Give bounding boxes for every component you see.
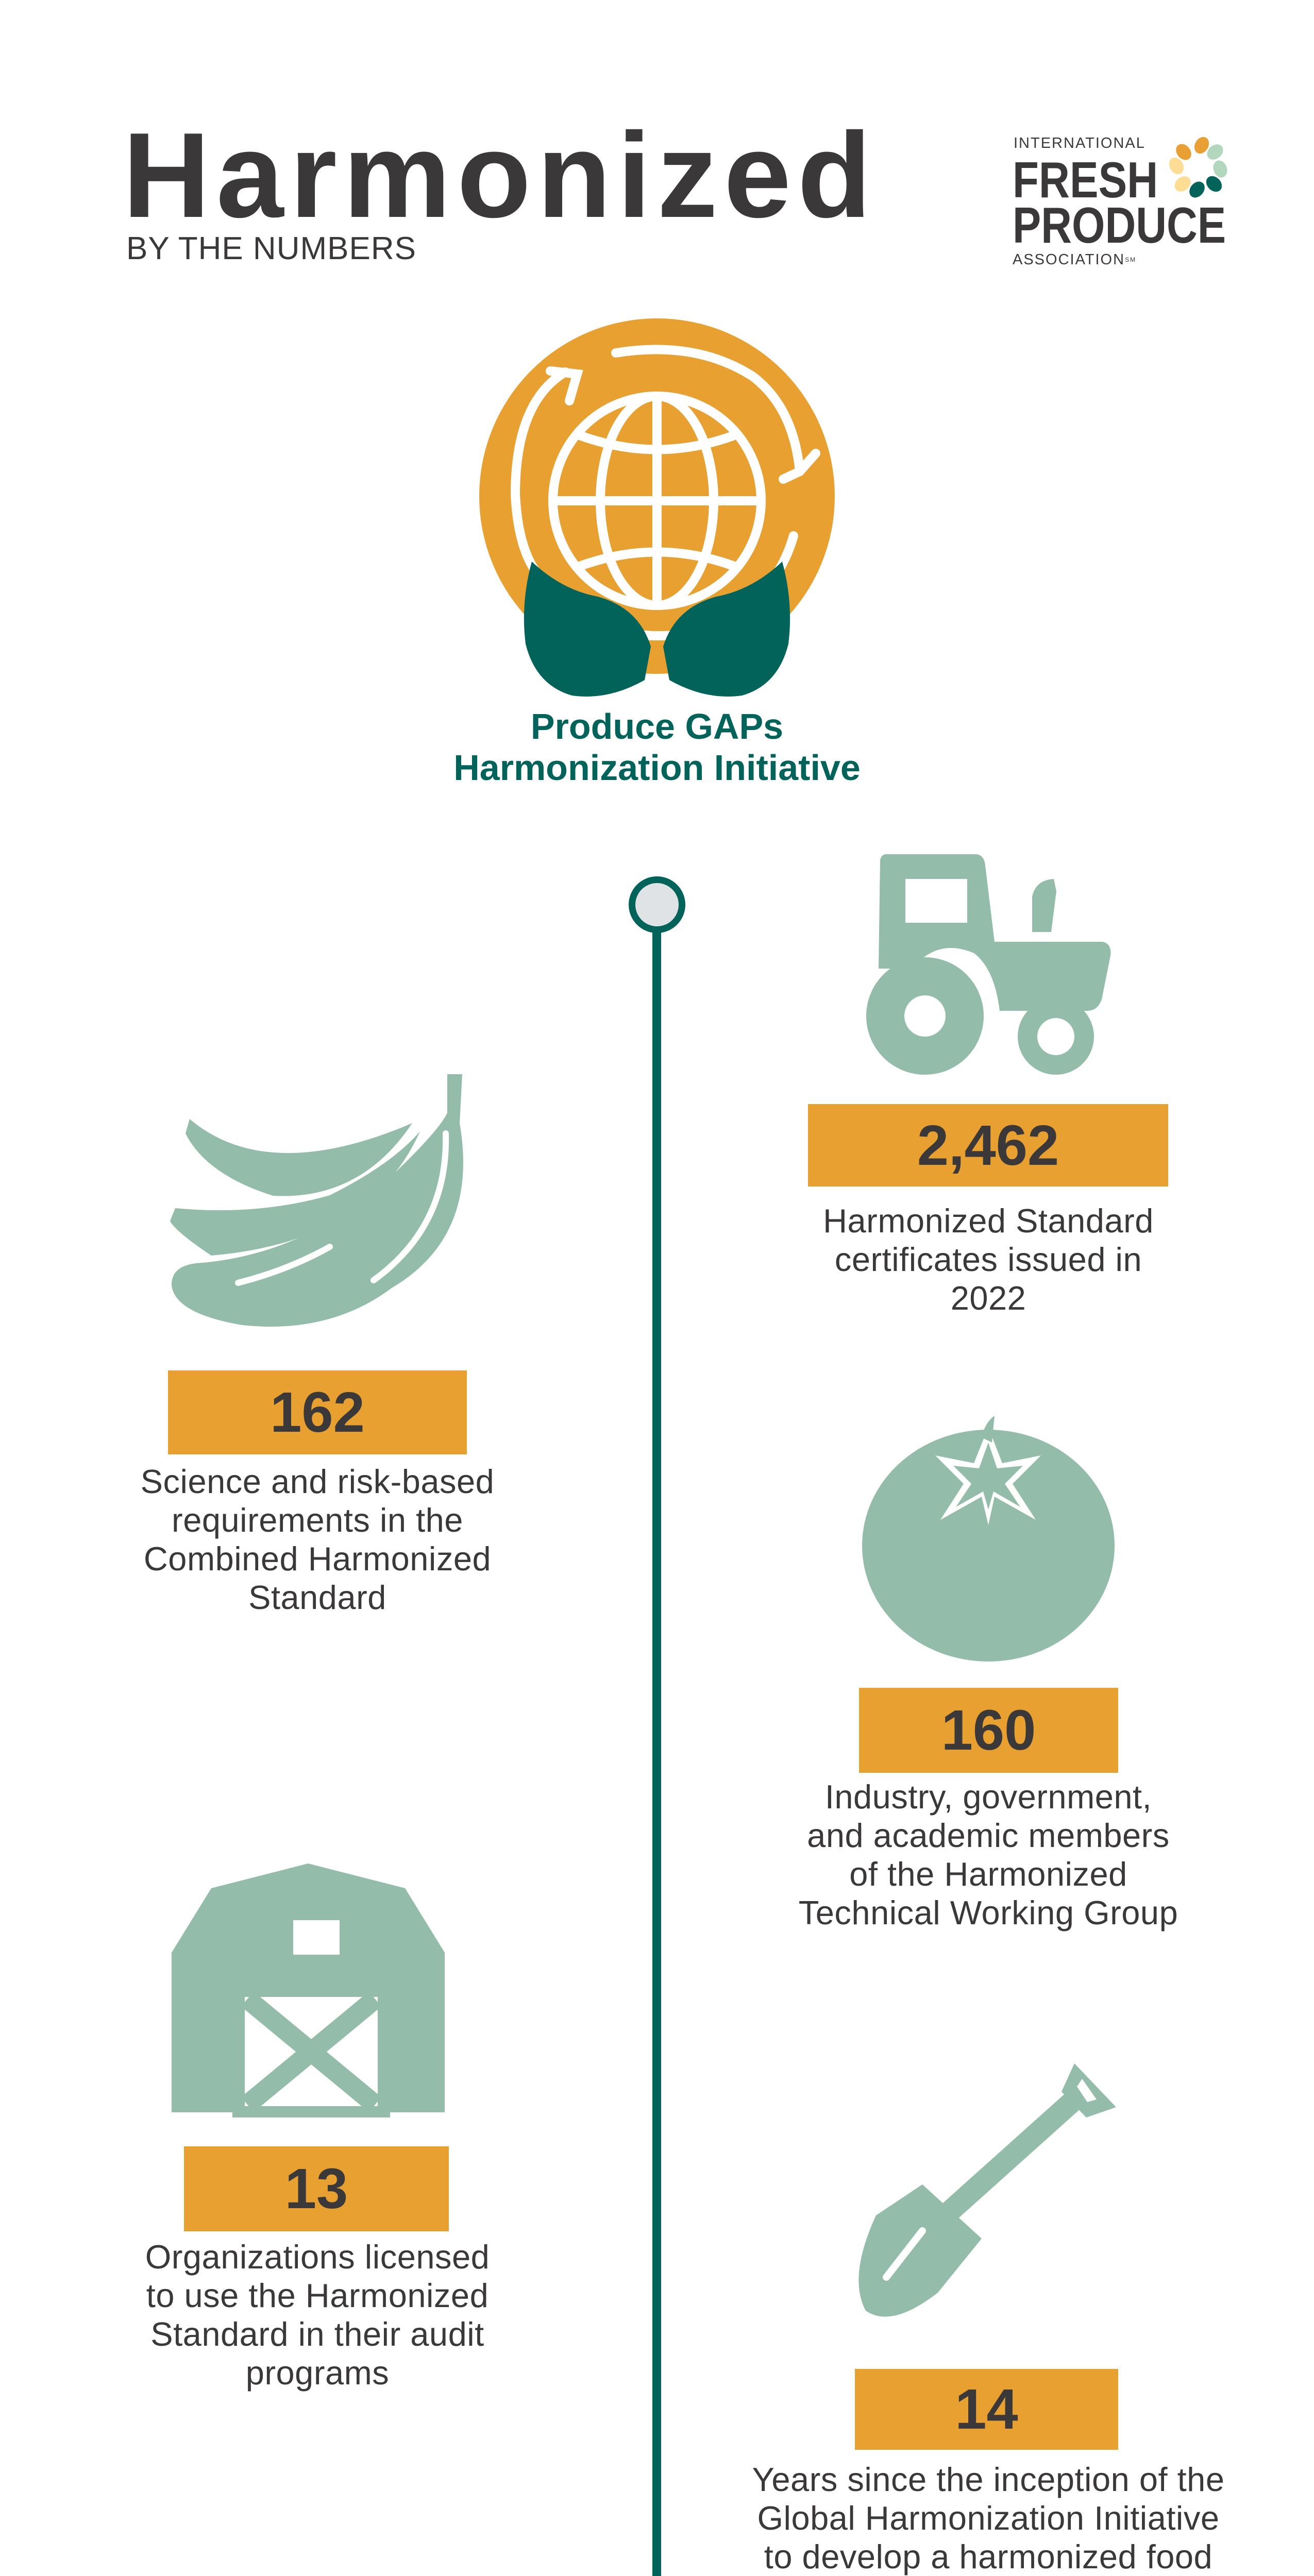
text: requirements: requirements in the	[172, 1501, 463, 1539]
text: members: and academic members	[807, 1817, 1170, 1854]
icon: banana	[170, 1074, 463, 1327]
text: organizations: programs	[246, 2354, 389, 2392]
text: certificates	[823, 1202, 1154, 1317]
initiative name: Harmonization Initiative	[453, 748, 861, 788]
text: members: of the Harmonized	[849, 1855, 1127, 1893]
text: members: Industry, government,	[825, 1778, 1152, 1816]
text: organizations: Organizations licensed	[145, 2238, 490, 2276]
title: Harmonized	[123, 107, 878, 243]
text: certificates: certificates issued in	[835, 1241, 1142, 1278]
text: requirements: Combined Harmonized	[144, 1540, 491, 1578]
icon: globe with leaves	[479, 318, 835, 697]
text: members	[799, 1778, 1178, 1931]
stat: 2,462: 2,462	[917, 1114, 1059, 1177]
logo: IFPA: INTERNATIONAL	[1014, 135, 1145, 151]
stat: 160	[859, 1688, 1118, 1773]
icon: shovel	[858, 2063, 1116, 2317]
text: years	[752, 2461, 1224, 2575]
text: requirements: Standard	[248, 1579, 386, 1616]
text: requirements: Science and risk-based	[141, 1463, 494, 1500]
stat: 14: 14	[955, 2378, 1018, 2441]
stat: 162: 162	[270, 1381, 365, 1444]
initiative name	[453, 706, 861, 788]
text: organizations: Standard in their audit	[150, 2315, 484, 2353]
text: requirements	[141, 1463, 494, 1616]
stat: 2,462	[808, 1104, 1168, 1187]
initiative name: Produce GAPs	[531, 706, 783, 747]
stat: 13	[184, 2146, 449, 2231]
text: organizations	[145, 2238, 490, 2392]
stat: 13: 13	[285, 2157, 348, 2221]
stat: 14	[855, 2369, 1118, 2450]
text: members: Technical Working Group	[799, 1894, 1178, 1931]
logo: IFPA: PRODUCE	[1013, 197, 1226, 253]
icon: tomato	[862, 1416, 1115, 1662]
text: years: Years since the inception of the	[752, 2461, 1224, 2498]
text: years: to develop a harmonized food	[764, 2538, 1212, 2575]
logo: IFPA: ASSOCIATIONSM	[1013, 251, 1136, 268]
logo: IFPA	[1013, 135, 1227, 268]
timeline start marker	[629, 876, 685, 933]
icon: barn	[172, 1863, 445, 2117]
subtitle: BY THE NUMBERS	[126, 231, 416, 266]
stat: 160: 160	[941, 1699, 1036, 1762]
text: organizations: to use the Harmonized	[146, 2277, 488, 2314]
logo: IFPA: FRESH	[1013, 151, 1158, 208]
icon: tractor	[866, 854, 1111, 1075]
stat: 162	[168, 1370, 467, 1454]
text: certificates: Harmonized Standard	[823, 1202, 1154, 1240]
text: certificates: 2022	[951, 1279, 1026, 1317]
text: years: Global Harmonization Initiative	[757, 2499, 1220, 2537]
timeline line	[652, 922, 661, 2576]
